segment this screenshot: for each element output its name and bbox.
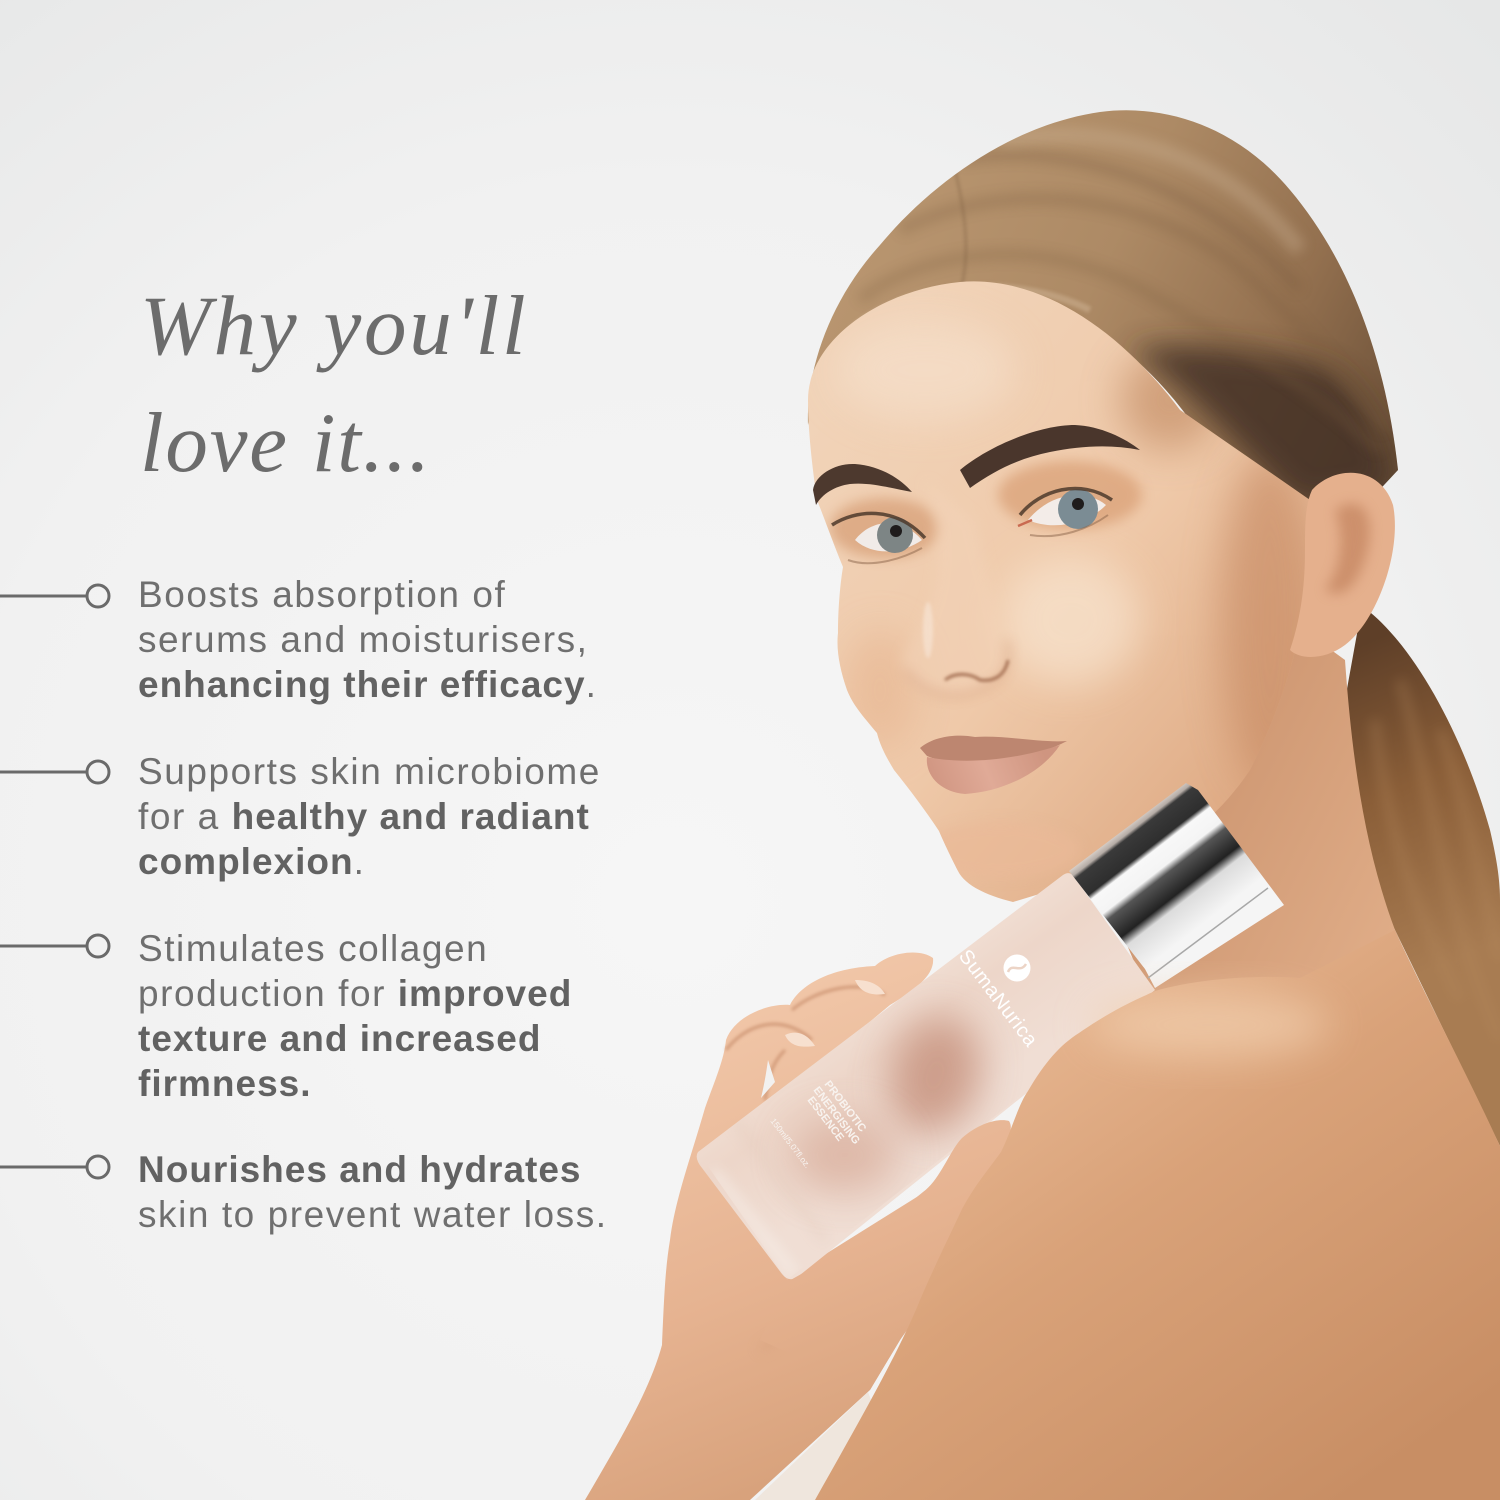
logo mark bbox=[1004, 954, 1030, 982]
ponytail bbox=[1345, 606, 1500, 1146]
lips bbox=[920, 736, 1067, 794]
neck bbox=[1100, 620, 1420, 1000]
gap between fingers and palm bbox=[761, 1060, 775, 1098]
benefit 2: complexion. bbox=[138, 841, 365, 882]
left eye bbox=[832, 513, 925, 563]
benefit 1 bbox=[138, 574, 597, 705]
left eyebrow bbox=[813, 464, 912, 505]
benefit 4: skin to prevent water loss. bbox=[138, 1194, 608, 1235]
ear bbox=[1290, 473, 1395, 657]
hair shading bbox=[850, 135, 1395, 505]
volume: 150ml/5.07fl.oz. bbox=[768, 1116, 813, 1170]
product name: PROBIOTIC bbox=[822, 1079, 868, 1134]
benefit 3 bbox=[138, 928, 572, 1104]
heading: love it... bbox=[140, 396, 432, 490]
thumb and palm bbox=[760, 1120, 1011, 1390]
product bottle bbox=[697, 783, 1284, 1279]
right eyebrow bbox=[960, 425, 1140, 488]
benefit 3: texture and increased bbox=[138, 1018, 541, 1059]
shoulder and body bbox=[815, 930, 1500, 1500]
hair bbox=[808, 110, 1398, 520]
benefit 3: Stimulates collagen bbox=[138, 928, 488, 969]
bullet marker 1 bbox=[0, 584, 110, 608]
ear shadow bbox=[1325, 504, 1370, 594]
bullet marker 2 bbox=[0, 760, 110, 784]
bullet marker 3 bbox=[0, 934, 110, 958]
benefit 2: Supports skin microbiome bbox=[138, 751, 601, 792]
benefit 1: enhancing their efficacy. bbox=[138, 664, 597, 705]
heading: Why you'll bbox=[140, 279, 528, 373]
product name: ESSENCE bbox=[805, 1095, 846, 1144]
benefit 2: for a healthy and radiant bbox=[138, 796, 590, 837]
brand name: SumaNurica bbox=[954, 946, 1042, 1052]
benefit 1: serums and moisturisers, bbox=[138, 619, 588, 660]
bottle cap bbox=[1069, 783, 1284, 988]
hand bbox=[585, 952, 1000, 1500]
heading bbox=[140, 279, 528, 490]
benefit 4 bbox=[138, 1149, 608, 1235]
bullet marker 4 bbox=[0, 1154, 110, 1180]
benefit 3: production for improved bbox=[138, 973, 572, 1014]
right eye bbox=[1018, 488, 1112, 536]
shoulder highlight bbox=[1090, 993, 1330, 1057]
benefit 1: Boosts absorption of bbox=[138, 574, 506, 615]
benefit 2 bbox=[138, 751, 601, 882]
benefit 4: Nourishes and hydrates bbox=[138, 1149, 582, 1190]
face bbox=[808, 281, 1320, 902]
bottle glass bbox=[697, 873, 1155, 1279]
towel bbox=[755, 1392, 875, 1500]
nose bbox=[902, 480, 1009, 695]
cap edge line bbox=[1148, 888, 1268, 978]
benefit 3: firmness. bbox=[138, 1063, 312, 1104]
product name: ENERGISING bbox=[811, 1085, 862, 1147]
